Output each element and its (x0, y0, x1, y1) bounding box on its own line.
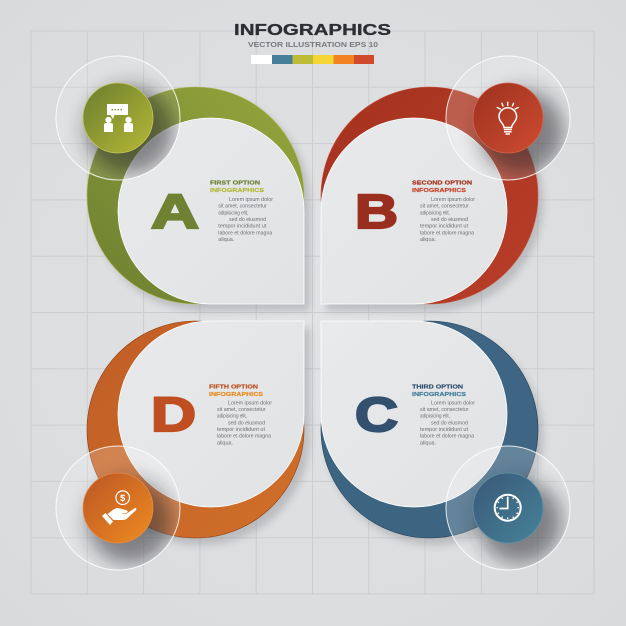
icon: light bulb (497, 102, 519, 134)
panel C text: Lorem ipsum dolor (431, 400, 475, 406)
panel C text: INFOGRAPHICS (412, 392, 466, 398)
panel C text: adipisicing elit, (420, 414, 450, 420)
panel C shadow (326, 328, 543, 545)
panel A crescent (87, 87, 304, 304)
panel D text: adipisicing elit, (217, 414, 247, 420)
panel A text: adipisicing elit, (218, 210, 249, 216)
panel: B second option (321, 56, 570, 311)
panel B text (412, 180, 475, 243)
letter A: A (151, 186, 199, 239)
letter B: B (355, 186, 398, 239)
panel C text: aliqua. (420, 440, 436, 446)
panel B shadow (326, 94, 543, 311)
panel A shadow (93, 94, 310, 311)
icon: hand holding coin: $ (120, 493, 126, 504)
panel C text (412, 384, 475, 446)
panel B text: tempor incididunt ut (420, 224, 468, 230)
panel D text: FIFTH OPTION (209, 384, 258, 390)
panel B text: adipisicing elit, (420, 210, 450, 216)
letter C: C (355, 389, 398, 442)
panel B teardrop (321, 118, 507, 304)
panel A teardrop (118, 118, 304, 304)
panel C crescent (321, 321, 538, 538)
panel B text: sit amet, consectetur (420, 204, 469, 210)
glass circle C (446, 446, 570, 570)
panel B text: Lorem ipsum dolor (431, 197, 475, 203)
panel A text: sed do eiusmod (229, 217, 266, 223)
panel D text: aliqua. (217, 440, 233, 446)
panel C teardrop (321, 321, 507, 507)
panel A text: aliqua. (218, 237, 235, 243)
panel B text: SECOND OPTION (412, 180, 472, 186)
panel D text: INFOGRAPHICS (209, 392, 263, 398)
panel A text: tempor incididunt ut (218, 224, 267, 230)
icon: clock (495, 495, 521, 521)
node circle C (473, 473, 543, 543)
panel A text: labore et dolore magna (218, 230, 273, 236)
icon: people talking (104, 104, 133, 132)
panel C text: sed do eiusmod (431, 420, 468, 426)
panel: D fifth option (56, 321, 310, 570)
colour legend bar (251, 55, 374, 64)
panel C text: tempor incididunt ut (420, 427, 468, 433)
panel B text: sed do eiusmod (431, 217, 468, 223)
panel D teardrop (118, 321, 304, 507)
panel D text: sed do eiusmod (228, 420, 265, 426)
title: INFOGRAPHICS (234, 22, 391, 39)
panel B text: labore et dolore magna (420, 230, 475, 236)
panel B text: INFOGRAPHICS (412, 188, 466, 194)
panel A text: Lorem ipsum dolor (229, 197, 273, 203)
panel D shadow (93, 328, 310, 545)
icon: hand holding coin (102, 491, 136, 525)
panel D text: tempor incididunt ut (217, 427, 265, 433)
node circle A (83, 83, 153, 153)
node circle B (473, 83, 543, 153)
panel C text: labore et dolore magna (420, 434, 475, 440)
panel A text: INFOGRAPHICS (210, 188, 264, 194)
panel: C third option (321, 321, 570, 570)
glass circle D (56, 446, 180, 570)
letter D: D (151, 389, 196, 442)
panel: A first option (56, 56, 310, 311)
subtitle: VECTOR ILLUSTRATION EPS 10 (248, 40, 378, 49)
panel A text: sit amet, consectetur (218, 204, 267, 210)
glass circle B (446, 56, 570, 180)
panel C text: THIRD OPTION (412, 384, 463, 390)
panel D text: labore et dolore magna (217, 434, 272, 440)
panel B crescent (321, 87, 538, 304)
panel C text: sit amet, consectetur (420, 407, 469, 413)
glass circle A (56, 56, 180, 180)
panel D text: sit amet, consectetur (217, 407, 266, 413)
panel A text: FIRST OPTION (210, 180, 260, 186)
panel D crescent (87, 321, 304, 538)
panel D text (209, 384, 272, 446)
panel B text: aliqua. (420, 237, 436, 243)
panel D text: Lorem ipsum dolor (228, 400, 272, 406)
node circle D (83, 473, 153, 543)
panel A text (210, 180, 273, 243)
